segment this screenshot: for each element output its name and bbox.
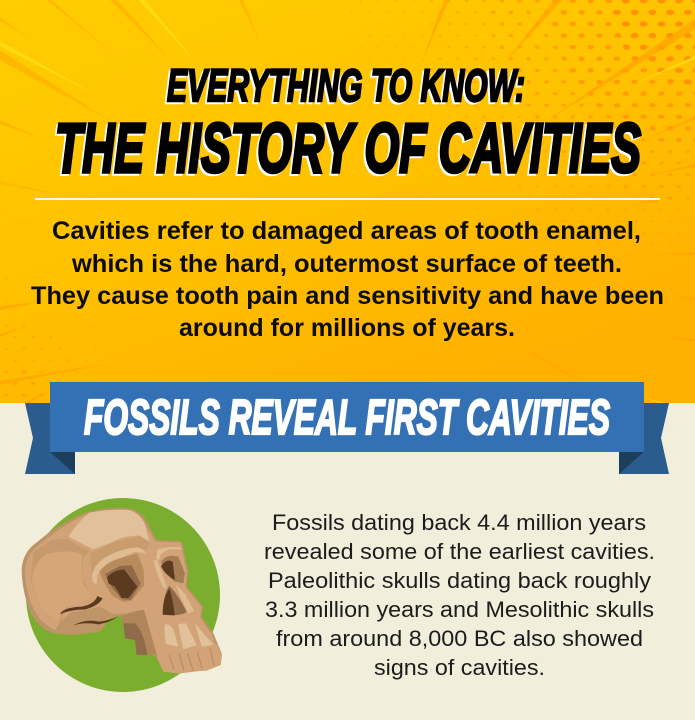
body text block (264, 510, 655, 680)
green circle (26, 498, 220, 692)
temporal band (90, 536, 149, 577)
body text block: Fossils dating back 4.4 million years (272, 510, 646, 535)
icon: skull on green circle (22, 498, 222, 692)
title (55, 60, 641, 187)
intro text block: which is the hard, outermost surface of teeth. (71, 250, 622, 278)
body text block: signs of cavities. (374, 655, 545, 680)
intro text block: Cavities refer to damaged areas of tooth enamel, (52, 217, 641, 245)
banner ribbon (50, 382, 644, 452)
upper teeth (165, 624, 178, 647)
cheek shadow (122, 610, 157, 655)
lower teeth row (157, 644, 222, 673)
panel: yellow header (0, 0, 695, 403)
body text block: 3.3 million years and Mesolithic skulls (265, 597, 654, 622)
intro text block (31, 217, 664, 342)
intro text block: They cause tooth pain and sensitivity and have been (31, 282, 664, 310)
title line 1: EVERYTHING TO KNOW: (167, 60, 525, 111)
brow ridge (92, 547, 146, 585)
banner left fold (50, 452, 75, 474)
skull illustration (22, 508, 222, 673)
banner right tail (619, 403, 669, 474)
body text block: from around 8,000 BC also showed (276, 626, 643, 651)
body text block: revealed some of the earliest cavities. (264, 539, 655, 564)
eye socket right (161, 556, 185, 583)
nose cavity (163, 586, 187, 615)
divider rule (35, 198, 660, 200)
banner left tail (25, 403, 75, 474)
intro text block: around for millions of years. (179, 314, 515, 342)
eye socket left (99, 553, 144, 602)
body text block: Paleolithic skulls dating back roughly (268, 568, 652, 593)
cranial cracks (60, 596, 103, 614)
banner right fold (619, 452, 644, 474)
banner (25, 382, 669, 474)
